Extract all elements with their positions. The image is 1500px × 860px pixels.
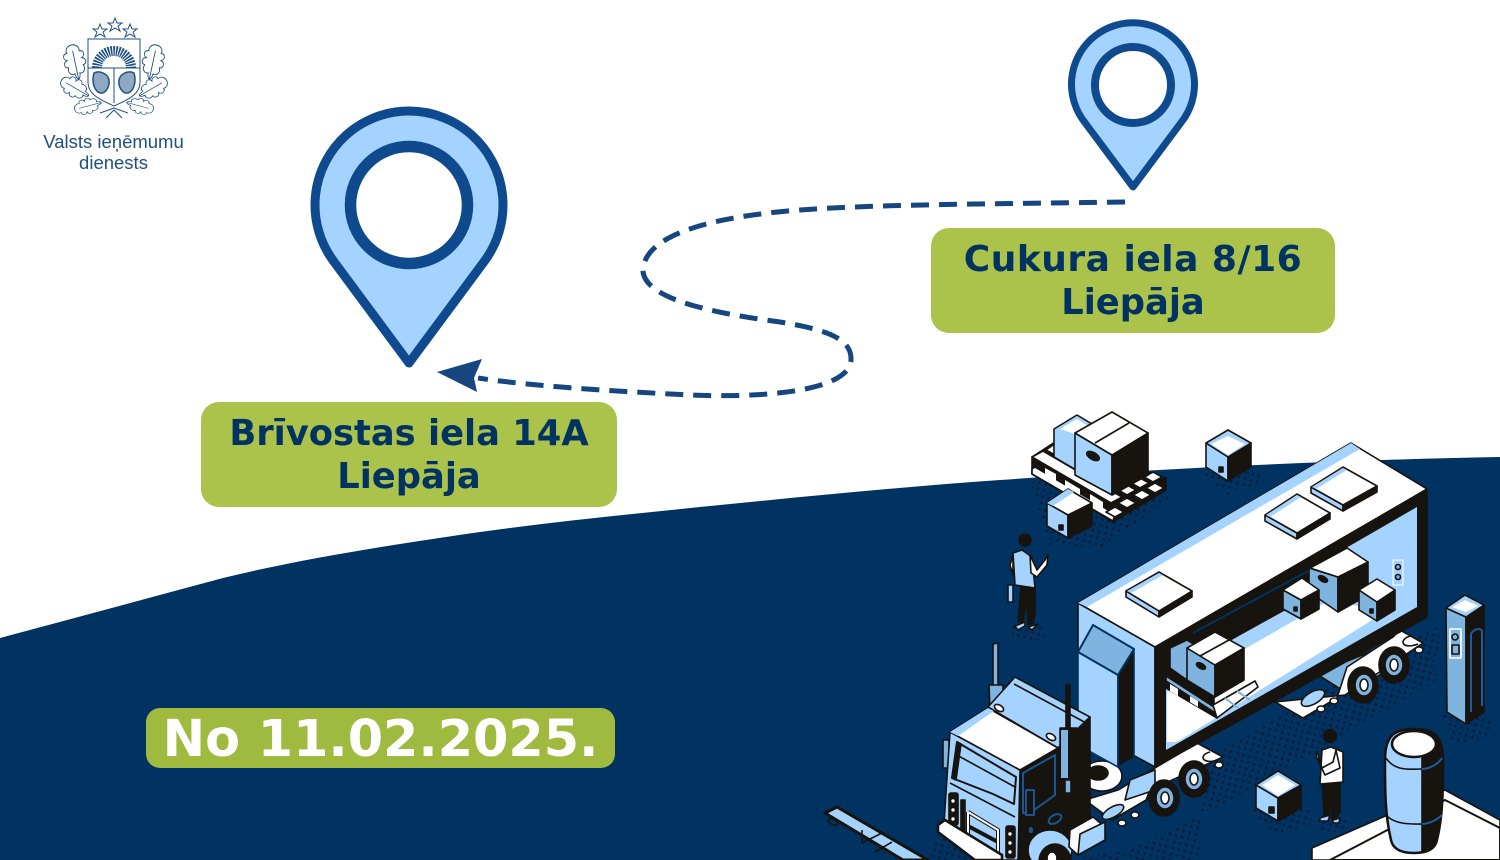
exhaust left [989,643,1003,712]
date text: No 11.02.2025. [163,709,598,768]
pin body [1071,23,1194,187]
second person [1316,730,1343,823]
mirror [943,740,949,768]
pallet gap tiles [1045,468,1056,483]
large box top [1075,412,1148,455]
fuel tank [1069,817,1105,855]
pallet top slat [1032,451,1122,503]
base platform [1312,790,1500,860]
address label: Brīvostas iela [201,402,617,507]
roof panel [1265,494,1330,539]
wheel [1179,761,1209,797]
cargo box [1283,578,1319,619]
address label: Cukura iela [931,228,1335,333]
logo text: Valsts ieņēmumu [43,131,184,152]
label text: Liepāja [337,456,481,497]
logo: Valsts ieņēmumu dienests [43,18,184,173]
door handle [1026,790,1034,815]
door outline [1023,755,1055,813]
box behind [1054,415,1092,470]
pallet inside trailer [1166,632,1258,718]
trailer ceiling [1166,547,1347,678]
front wheel [1028,830,1072,860]
wheel [1348,667,1378,703]
large box left face [1075,433,1112,495]
logo emblem [57,18,171,118]
front chassis [1082,743,1223,826]
cab side [1018,717,1090,860]
pin hole [1095,47,1171,123]
box near pallet [1047,489,1092,538]
label box [931,228,1335,333]
side lights [1047,812,1063,826]
pin: Brīvostas iela [315,111,503,363]
axle [1320,640,1400,695]
headlights [949,793,958,825]
label box [201,402,617,507]
wheel [1379,647,1409,683]
trailer [1078,443,1427,767]
background: navy curved area [0,457,1500,860]
label text: Liepāja [1061,282,1205,323]
pallet back slat [1046,445,1075,466]
sleeper roof [988,677,1090,748]
pallet base [1032,442,1166,522]
dashed route line [478,202,1125,396]
truck cab [938,643,1105,860]
logo text: dienests [79,152,148,173]
route: dashed line with arrow [437,202,1125,396]
exhaust right [1060,684,1077,780]
cylinder tank [1385,729,1443,853]
spare tyre [1082,761,1122,791]
grille [961,800,965,836]
trailer roof [1078,443,1427,647]
floor box [1256,771,1301,821]
bumper [938,820,1002,860]
box standalone top [1206,430,1251,481]
refrigeration unit [1078,625,1134,767]
cab front [944,732,1020,860]
ramp at bottom left [825,807,928,860]
pallet lower slat [1032,467,1115,521]
cab roof [950,708,1058,770]
roof panel [1311,467,1377,511]
person with phone [1008,534,1048,630]
wheel [1149,780,1179,816]
trailer front face [1078,603,1155,767]
pin body [315,111,503,363]
cargo box [1359,579,1395,621]
large box right face [1112,433,1148,495]
pallet top tiles [1144,472,1162,482]
trailer side frame [1155,489,1427,767]
trailer floor [1167,600,1385,742]
windshield [952,742,1016,804]
large cargo box [1309,548,1368,612]
charging tower [1446,595,1484,724]
illustration: truck and warehouse [825,412,1500,860]
trailer opening [1166,507,1417,750]
pin hole [350,146,468,264]
label text: Cukura iela 8/16 [964,239,1302,280]
arrow head [437,359,482,392]
date box [146,708,615,768]
box tape and handle [1095,423,1129,443]
rear chassis [1275,630,1423,718]
ground shadows [930,470,1492,860]
roof panel [1126,572,1192,617]
platform [1275,630,1423,718]
pallet with boxes [1032,412,1166,522]
date label [146,708,615,768]
platform [1085,743,1223,820]
label text: Brīvostas iela 14A [229,413,589,454]
wall socket [1393,560,1403,585]
pin: Cukura iela [1071,23,1194,187]
